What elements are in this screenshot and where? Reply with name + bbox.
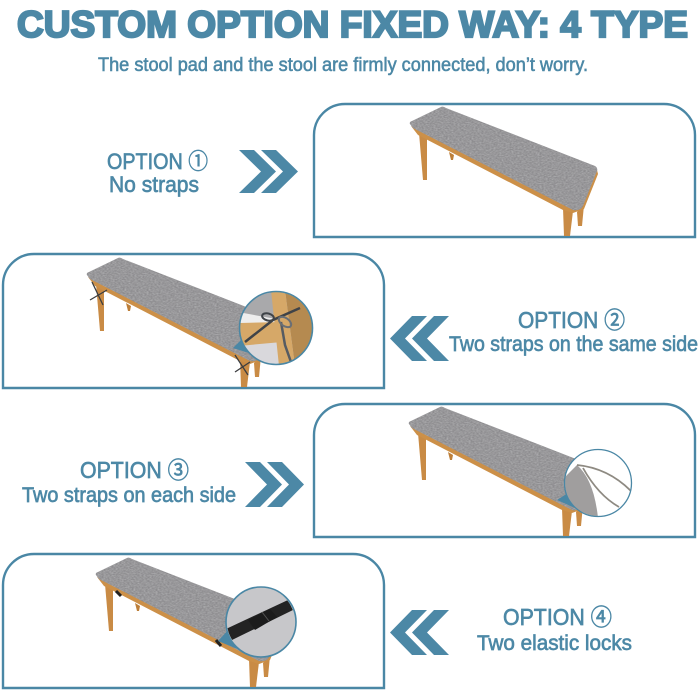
callout circle: buckle detail <box>218 587 296 657</box>
subtitle: The stool pad and the stool are firmly connected, don’t worry. <box>98 55 588 76</box>
arrow: chevrons left 2 <box>390 316 449 361</box>
arrow: chevrons right 1 <box>239 150 298 193</box>
option 3 label: Two straps on each side <box>22 484 236 507</box>
straps on bench 2 <box>90 282 250 375</box>
title: CUSTOM OPTION FIXED WAY: 4 TYPE <box>17 4 688 45</box>
panel: option 3 <box>22 404 695 537</box>
panel frame 2 <box>3 254 384 388</box>
option 4 label <box>477 604 632 655</box>
elastic locks on bench 4 <box>116 591 221 646</box>
arrow: chevrons right 3 <box>245 462 304 507</box>
panel frame 3 <box>314 404 695 537</box>
arrow: chevrons left 4 <box>390 610 449 655</box>
option 2 label <box>449 307 698 356</box>
panel frame 4 <box>3 554 384 688</box>
callout circle: strings detail <box>557 450 632 518</box>
option 1 label: OPTION ① <box>107 149 208 174</box>
panel: option 4 <box>3 554 632 688</box>
panel: option 1 <box>107 104 695 237</box>
option 1 label <box>107 149 208 197</box>
bench 2 <box>87 258 275 387</box>
option 3 label: OPTION ③ <box>80 457 189 483</box>
option 2 label: OPTION ② <box>518 307 625 333</box>
callout circle: tie detail <box>233 288 315 366</box>
option 1 label: No straps <box>109 172 199 197</box>
bench 1 <box>410 107 598 236</box>
panel: option 2 <box>3 254 698 388</box>
bench 4 <box>96 558 284 687</box>
option 4 label: Two elastic locks <box>477 632 632 655</box>
option 4 label: OPTION ④ <box>503 604 612 630</box>
bench 3 <box>409 407 597 536</box>
panel frame 1 <box>314 104 695 237</box>
option 3 label <box>22 457 236 507</box>
